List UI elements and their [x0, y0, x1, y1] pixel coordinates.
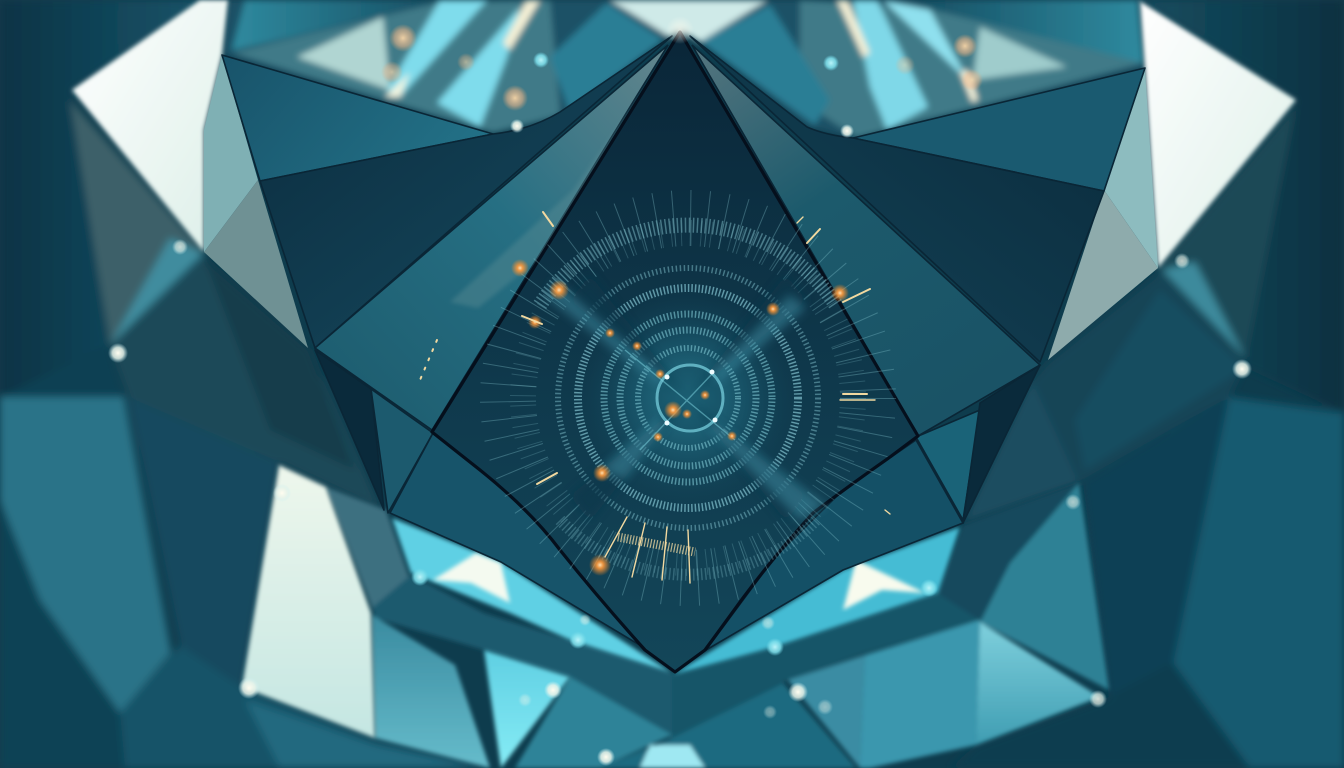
- white shard: lower centre right: [843, 560, 925, 610]
- lower facets: [326, 483, 1109, 768]
- left wing of diamond: [315, 45, 668, 430]
- golden dashes: [420, 212, 890, 583]
- white nodes on the central ring: [664, 370, 718, 426]
- right wing of diamond: [692, 45, 1040, 436]
- facet beside upper right shard: [1104, 70, 1158, 268]
- cyan band: left of diamond base: [392, 518, 672, 673]
- cross lines at the centre: [625, 350, 735, 450]
- white shard: upper right: [1138, 0, 1296, 268]
- blurred orange lights in top band: [381, 24, 983, 111]
- outer facets: left side: [0, 0, 490, 768]
- data rings: [508, 218, 868, 578]
- top band facets and streaks: [223, 0, 1145, 138]
- highlight shard on left wing: [450, 62, 664, 308]
- facet beside upper left shard: [204, 55, 258, 252]
- grey facet below upper right shard: [1048, 190, 1158, 360]
- white shard: lower left: [242, 465, 375, 738]
- glass panels around the central diamond: [222, 36, 1145, 650]
- outer facets: right side: [950, 0, 1344, 768]
- white shard: upper left: [72, 0, 228, 252]
- cyan triangle: lower left: [484, 650, 570, 768]
- central diamond: [432, 32, 918, 672]
- light beams crossing the centre: [548, 280, 825, 520]
- grey facet below upper left shard: [204, 180, 308, 348]
- white shard: lower centre left: [433, 553, 510, 603]
- dark gaps where beams cut the rings: [570, 275, 806, 521]
- orange sparks: [511, 259, 849, 576]
- central ring: [657, 365, 723, 431]
- cyan band: right of diamond base: [672, 527, 960, 675]
